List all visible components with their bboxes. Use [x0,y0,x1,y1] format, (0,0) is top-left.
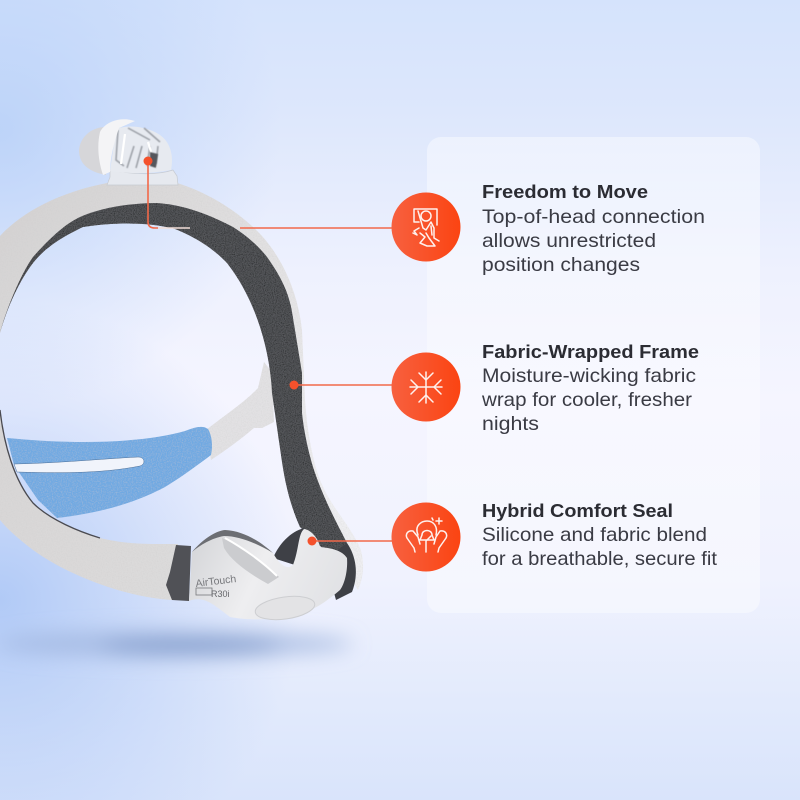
dark seal [273,528,315,566]
callout: fabric-wrapped frame [290,380,392,390]
icon: snowflake [392,352,460,422]
icon: comfort face [392,502,460,572]
text: fabric-wrapped frame: Fabric-Wrapped Frame [482,342,699,362]
lower frame band [0,413,178,600]
side strap [206,362,274,460]
callout: freedom to move [144,156,392,228]
floor shadow [0,631,353,657]
text: hybrid comfort seal: for a breathable, secure fit [482,548,718,570]
mask illustration [0,119,363,623]
strap slot [14,457,144,473]
clear elbow [110,127,172,173]
text: fabric-wrapped frame: nights [482,413,539,435]
text: hybrid comfort seal [482,501,718,570]
text: hybrid comfort seal: Hybrid Comfort Seal [482,501,673,521]
frame collar [166,545,191,601]
product mark: R30i [211,589,230,599]
text: freedom to move: position changes [482,254,640,276]
text: hybrid comfort seal: Silicone and fabric blend [482,524,707,546]
callout: hybrid comfort seal [308,536,392,546]
feature panel [427,137,760,613]
icon: sleeper [392,192,460,262]
text: freedom to move: Freedom to Move [482,182,648,202]
band edge line [0,410,100,538]
rear seal edge [325,543,356,600]
nozzle ridge [222,538,279,584]
connector cap [79,127,106,175]
headgear frame [0,183,363,590]
text: fabric-wrapped frame: wrap for cooler, fresher [481,389,693,411]
text: freedom to move: allows unrestricted [482,230,656,252]
text: fabric-wrapped frame [481,342,699,435]
product mark [195,573,237,599]
fabric inner band [0,203,347,560]
connector ring [98,119,135,175]
nasal cushion [189,529,347,623]
text: freedom to move [482,182,705,276]
top rim [192,530,273,553]
blue strap [7,427,212,518]
product mark: AirTouch [195,573,237,590]
text: fabric-wrapped frame: Moisture-wicking fabric [482,365,696,387]
clear neck [107,170,178,185]
cushion side disc [254,593,316,623]
text: freedom to move: Top-of-head connection [482,206,705,228]
